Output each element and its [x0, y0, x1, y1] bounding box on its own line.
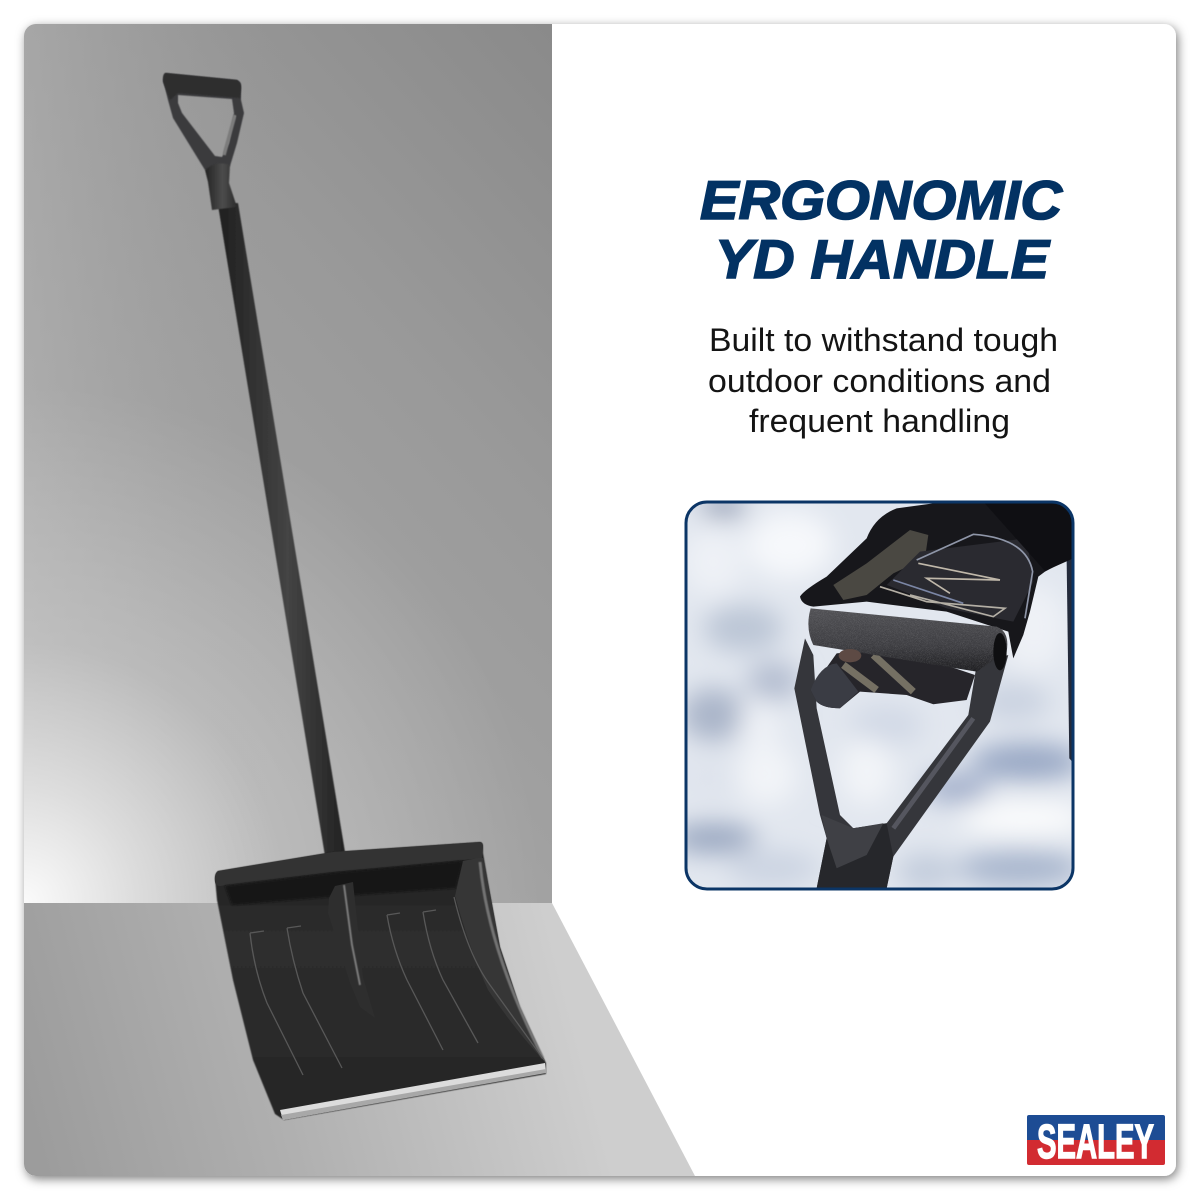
- lower fingers: [816, 652, 975, 708]
- grip hollow end: [993, 633, 1007, 670]
- blade ribs: [250, 897, 544, 1075]
- background post: [1066, 559, 1072, 761]
- thumb: [811, 663, 858, 708]
- glove stitching: [880, 534, 1033, 618]
- blade metal wear strip: [280, 1063, 546, 1120]
- panel: product studio backdrop: [24, 24, 695, 1176]
- body text: Built to withstand tough: [709, 322, 1058, 358]
- finger highlights: [843, 655, 913, 692]
- glove back highlight: [887, 538, 1033, 622]
- shovel shaft: [218, 203, 345, 856]
- handle right arm highlight: [224, 115, 235, 155]
- frame highlight: [893, 718, 973, 828]
- blade right wall highlight: [480, 862, 543, 1058]
- D-handle frame: [794, 638, 1008, 888]
- body text: outdoor conditions and: [708, 363, 1051, 399]
- shovel blade: [215, 842, 546, 1120]
- blade socket highlight: [344, 885, 360, 985]
- photo border: [686, 502, 1073, 889]
- grip bar: [808, 608, 1007, 672]
- blade inner shadow: [225, 861, 463, 905]
- blade top rim: [215, 842, 483, 886]
- frame shaft: [817, 823, 893, 888]
- heading: [700, 169, 1063, 290]
- handle grip: [163, 73, 241, 100]
- heading: ERGONOMIC: [700, 169, 1063, 231]
- glove knuckle panel: [833, 530, 928, 600]
- body text: frequent handling: [749, 403, 1010, 439]
- glove: [800, 502, 1070, 658]
- blade socket: [328, 882, 375, 1018]
- grip speckle: [808, 608, 1007, 672]
- wear strip edge: [281, 1069, 546, 1120]
- heading: YD HANDLE: [715, 228, 1051, 290]
- photo: gloved hand on handle: [670, 497, 1087, 890]
- sleeve: [986, 505, 1072, 570]
- frame neck highlight: [822, 815, 883, 868]
- body text: [708, 322, 1058, 439]
- handle socket: [205, 163, 237, 210]
- shovel: product image: [163, 73, 546, 1120]
- shovel D handle: [163, 73, 244, 170]
- blade right curved wall: [455, 858, 545, 1062]
- fingertip brown: [839, 649, 861, 662]
- snow texture: [688, 504, 1072, 888]
